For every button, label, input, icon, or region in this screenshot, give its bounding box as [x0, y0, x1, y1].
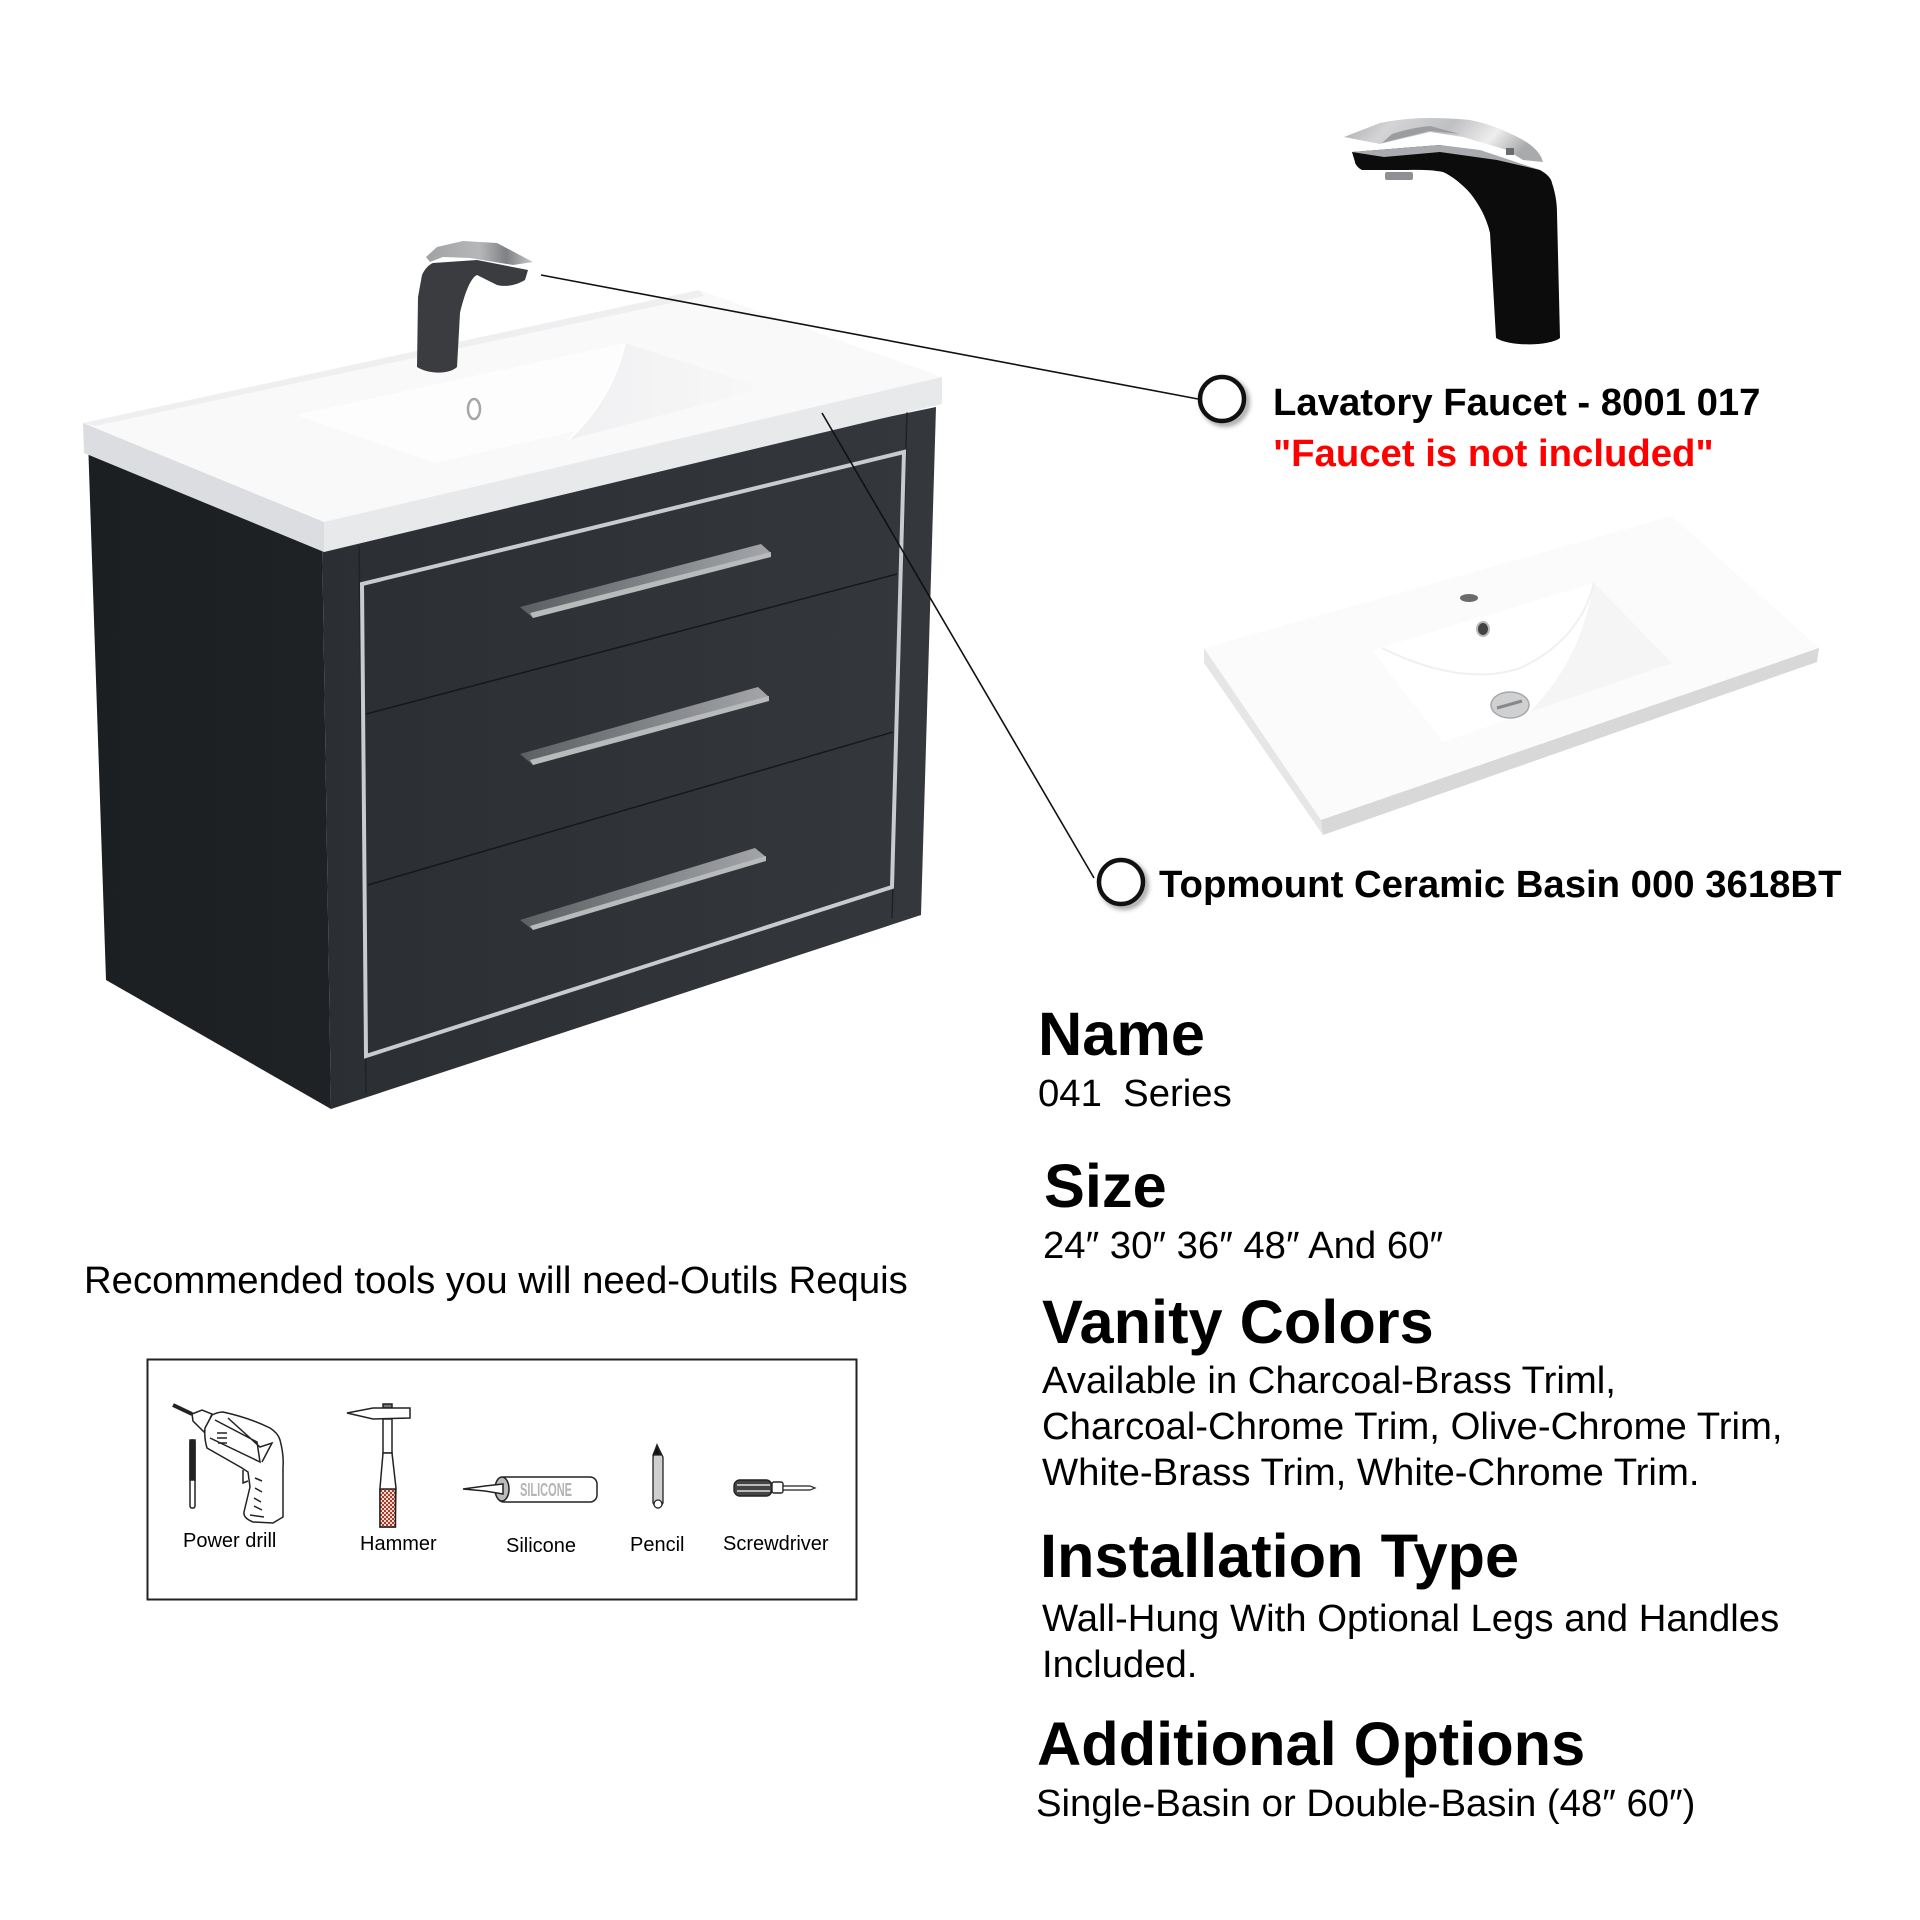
label: silicone: Silicone: [506, 1535, 576, 1557]
icon: hammer: [347, 1404, 410, 1527]
callout line to basin: [822, 413, 1094, 878]
callout marker: faucet: [1200, 377, 1247, 424]
spec: name: [1038, 1000, 1232, 1115]
spec: vanity colors: Vanity Colors: [1042, 1288, 1434, 1356]
spec: size: Size: [1044, 1152, 1167, 1220]
product image: ceramic basin: [1204, 516, 1819, 835]
panel: recommended tools: [148, 1360, 856, 1600]
spec: additional options: Additional Options: [1037, 1710, 1585, 1778]
faucet label: Lavatory Faucet - 8001 017: [1273, 381, 1760, 424]
spec: installation type: [1040, 1522, 1779, 1686]
label: pencil: Pencil: [630, 1534, 684, 1556]
callout marker: basin: [1099, 860, 1146, 907]
small faucet on vanity: [417, 241, 533, 373]
icon: pencil: [653, 1445, 663, 1508]
icon: power drill: [173, 1405, 283, 1523]
cabinet front: [322, 407, 936, 1109]
icon: silicone tube: SILICONE: [520, 1480, 572, 1500]
spec: size: 24″ 30″ 36″ 48″ And 60″: [1043, 1224, 1443, 1267]
cabinet side panel: [88, 440, 331, 1109]
tools heading: Recommended tools you will need-Outils Requis: [84, 1259, 908, 1302]
spec: vanity colors: [1042, 1288, 1783, 1494]
icon: silicone tube: [463, 1477, 597, 1502]
drawer handle 1: [520, 544, 771, 618]
spec: name: Name: [1038, 1000, 1205, 1068]
ceramic countertop: [83, 290, 942, 552]
product image: faucet: [1344, 118, 1560, 344]
icon: screwdriver: [734, 1480, 815, 1496]
spec: installation type: Installation Type: [1040, 1522, 1519, 1590]
label: power drill: Power drill: [183, 1530, 276, 1552]
label: hammer: Hammer: [360, 1533, 437, 1555]
faucet not included note: "Faucet is not included": [1273, 432, 1714, 475]
spec: size: [1043, 1152, 1443, 1267]
spec: vanity colors: White-Brass Trim, White-Chrome Trim.: [1042, 1451, 1699, 1494]
spec: vanity colors: Charcoal-Chrome Trim, Olive-Chrome Trim,: [1042, 1405, 1783, 1448]
label: screwdriver: Screwdriver: [723, 1533, 829, 1555]
drawer trim and lines: [359, 411, 907, 1094]
callout line to faucet: [541, 275, 1198, 399]
spec: installation type: Included.: [1042, 1643, 1197, 1686]
spec: vanity colors: Available in Charcoal-Brass Triml,: [1042, 1359, 1616, 1402]
spec: additional options: Single-Basin or Double-Basin (48″ 60″): [1036, 1782, 1695, 1825]
drawer handle 3: [520, 848, 766, 930]
drawer handle 2: [520, 687, 769, 765]
vanity cabinet illustration: [83, 241, 942, 1109]
spec: additional options: [1036, 1710, 1695, 1825]
spec: installation type: Wall-Hung With Optional Legs and Handles: [1042, 1597, 1779, 1640]
spec: name: 041 Series: [1038, 1072, 1232, 1115]
basin label: Topmount Ceramic Basin 000 3618BT: [1159, 863, 1841, 906]
